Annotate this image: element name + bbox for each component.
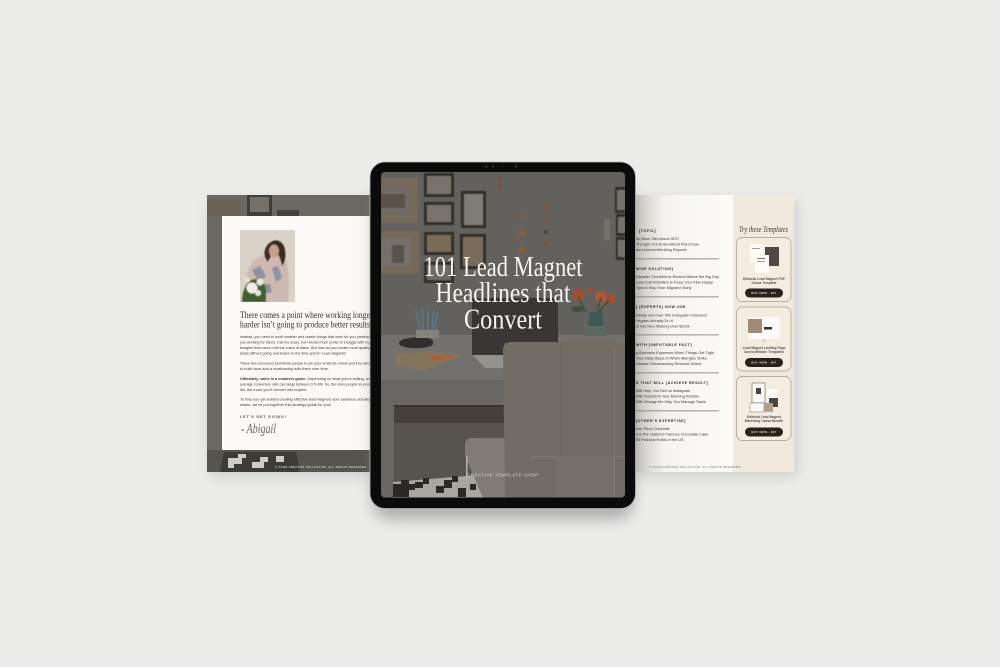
right page headline lists: Will Help You Sell on Instagram (636, 388, 690, 393)
letter body text: list, the more you’ll convert into buyers. (240, 387, 307, 392)
right page headline lists: iner Party Checklist (636, 426, 670, 431)
tablet title: Headlines that (436, 278, 571, 309)
rug (393, 475, 486, 498)
right page footer: © YOUR CREATIVE COLLECTIVE. ALL RIGHTS RESERVED. (649, 465, 742, 469)
product card 3: Editorial Lead Magnet (747, 415, 782, 419)
letter body text (240, 334, 371, 407)
page: left letter page (207, 195, 374, 477)
letter body text: average conversion rate can range between 0.5–6%. So, the more people on your (240, 382, 371, 386)
page rug (220, 452, 300, 472)
desk (381, 335, 625, 498)
letter body text: Instead, you need to work smarter and create things that work for you (instead (240, 334, 370, 339)
right page headline lists: Low-Cost Activities to Keep Your Kids Happy (636, 280, 713, 284)
product card 1: BUY NOW · $47 (751, 291, 777, 295)
right page headline lists: d in the Garten’s Famous Chocolate Cake (636, 432, 708, 436)
laptop (472, 298, 558, 355)
product card 2 (736, 307, 791, 371)
right page headline lists: [TOPIC] (639, 229, 656, 233)
letter body text: beagles than work until the crack of dawn. But how do you create more quality (240, 345, 370, 350)
letter body text: you working for them). Call me crazy, but I would much prefer to snuggle with my (240, 340, 370, 344)
right page headline lists: WITH [INEVITABLE FACT] (636, 343, 692, 347)
letter body text: These free resources incentivize people to join your email list, where you’ll be able (240, 360, 370, 366)
right page headline lists: Vegans Actually Do It (636, 318, 674, 323)
wall frames (381, 173, 625, 283)
tablet bezel (370, 162, 636, 508)
right page headline lists: Really Got Over 50k Instagram Followers (636, 312, 707, 318)
chair back (503, 342, 625, 498)
left page footer: © YOUR CREATIVE COLLECTIVE. ALL RIGHTS RESERVED. (275, 465, 368, 469)
page: right headlines page (632, 195, 797, 477)
wall hearts (498, 177, 549, 254)
tablet brand line: CREATIVE TEMPLATE SHOP (467, 472, 538, 478)
page photo background (207, 195, 370, 472)
tablet camera (484, 165, 518, 168)
letter body text: leads without going overboard on the time spent? Lead magnets! (240, 350, 346, 356)
tablet title: 101 Lead Magnet (424, 252, 583, 283)
signature: - Abigail (241, 422, 276, 437)
product card 1: Editorial Lead Magnet PDF (743, 277, 785, 281)
tablet shadow (372, 186, 634, 520)
right page headline lists: S THAT WILL [ACHIEVE RESULT] (636, 381, 708, 385)
letter body text: To help you get started creating effective lead magnets your audience actually (240, 396, 370, 402)
desk items (396, 308, 462, 371)
tablet title (424, 252, 583, 336)
right page headline lists: dy Been Told About SEO (636, 236, 679, 241)
right page headline lists: rs Are Now Making Over $110k (636, 324, 690, 328)
right page headline lists: Will Change the Way You Manage Tasks (636, 399, 706, 404)
right page headline lists: and Annual Wedding Reports (636, 247, 687, 252)
product card 2: Canva Website Templates (744, 350, 784, 354)
portrait photo (240, 230, 295, 302)
letter heading: harder isn’t going to produce better results (240, 320, 370, 330)
right page headline lists: Will Transform Your Morning Routine (636, 394, 699, 398)
right page headline lists: MISE SOLUTION] (636, 267, 673, 271)
product card 3: BUY NOW · $47 (751, 430, 777, 434)
letter body text: Ultimately, sales is a numbers game. Depending on what you’re selling, an (240, 376, 370, 381)
product card 2: BUY NOW · $47 (751, 361, 777, 365)
right page headline lists: 50 Podcast Hosts in the US (636, 437, 684, 442)
right page headline lists: [OTHER’S EXPERTISE] (636, 419, 686, 423)
sidebar (733, 195, 794, 472)
tablet title: Convert (464, 304, 542, 336)
tablet (370, 162, 636, 508)
product card 1: Canva Template (751, 281, 777, 285)
right page headline lists: Disaster Checklist to Review Before the Big Day (636, 274, 719, 279)
right page headline lists: Tips to Stop Your Migraine Early (636, 285, 691, 290)
letter body text: to build trust and a relationship with them over time. (240, 366, 329, 371)
product card 3: Marketing Canva Bundle (745, 419, 783, 423)
right page headline lists: Your Daily Steps in When Allergies Strike (636, 356, 707, 360)
letter panel (222, 216, 370, 450)
letter sign-off: LET’S GET GOING! (240, 415, 287, 419)
chair seat (465, 438, 507, 498)
right page headline lists: ] [EXPERTS] NOW USE (636, 305, 686, 309)
product card 1 (736, 238, 791, 302)
right page headline lists (636, 229, 719, 442)
sidebar heading: Try these Templates (739, 225, 788, 234)
product card 2: Lead Magnet Landing Page (743, 346, 786, 350)
letter heading: There comes a point where working longe (240, 310, 370, 320)
right page headline lists: Thought You Knew About Plant Care (636, 242, 699, 246)
tablet screen photo (381, 172, 625, 498)
flowers (571, 288, 616, 336)
right page headline lists: Handle Embarrassing Reviews Online (636, 361, 702, 366)
letter body text: wants, we’ve put together this strategy guide for you! (240, 402, 331, 407)
product card 3 (736, 376, 791, 440)
letter heading (240, 310, 370, 330)
right page headline lists: g Business Expenses When Things Get Tight (636, 350, 715, 355)
